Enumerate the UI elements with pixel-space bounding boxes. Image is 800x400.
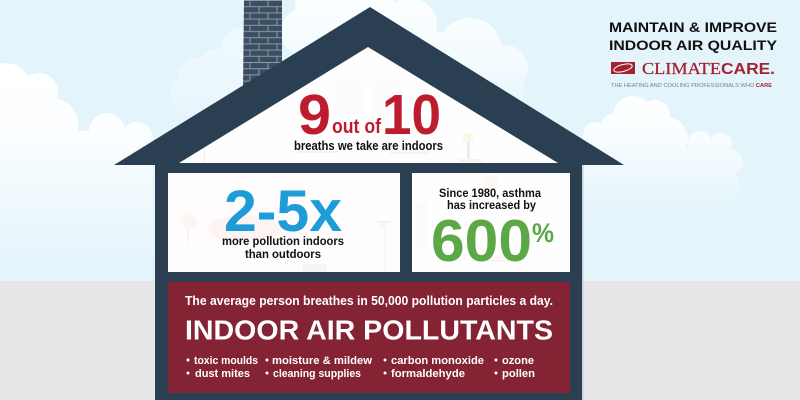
caption: more pollution indoors <box>222 236 344 261</box>
caption: since 1980 <box>439 188 542 212</box>
list column 3 <box>384 355 484 380</box>
logo wordmark <box>642 59 775 78</box>
roof <box>114 7 624 165</box>
list: pollutants <box>186 355 535 380</box>
chimney <box>243 0 282 88</box>
caption: since 1980: has increased by <box>447 200 537 212</box>
list column 1: toxic moulds <box>194 355 258 367</box>
wall edge highlight <box>582 165 584 400</box>
header: maintain and improve <box>609 19 778 53</box>
logo tagline: THE HEATING AND COOLING PROFESSIONALS WHO CARE <box>611 83 772 89</box>
stat: 9 out of 10: out of <box>332 116 381 138</box>
list column 4 <box>494 355 535 380</box>
attic interior <box>179 47 558 163</box>
list column 2: moisture & mildew <box>272 355 372 367</box>
logo wordmark: CARE. <box>721 61 775 78</box>
logo mark <box>611 62 635 74</box>
heading: indoor air pollutants: INDOOR AIR POLLUTANTS <box>185 314 553 346</box>
stat: 2-5x: 2-5x <box>224 179 342 244</box>
logo wordmark: CLIMATE <box>642 59 721 78</box>
list column 2: cleaning supplies <box>273 368 361 380</box>
header: maintain and improve: MAINTAIN & IMPROVE <box>609 19 777 35</box>
cloud: behind roof <box>281 0 528 118</box>
list column 3: formaldehyde <box>391 368 465 380</box>
panel: indoor air pollutants <box>168 282 570 393</box>
list column 1: dust mites <box>195 368 250 380</box>
stat: 9 out of 10: 10 <box>382 83 441 147</box>
list column 4: ozone <box>502 355 534 367</box>
sky <box>0 0 800 282</box>
list column 2 <box>266 355 372 380</box>
cloud: behind chimney <box>170 27 270 118</box>
caption: since 1980: Since 1980, asthma <box>439 188 542 200</box>
faint room furniture <box>415 175 510 262</box>
panel: pollution multiplier <box>168 173 400 272</box>
faint room furniture <box>180 213 393 272</box>
list column 3: carbon monoxide <box>391 355 484 367</box>
stat: 600%: % <box>532 218 554 248</box>
house walls <box>155 160 583 400</box>
cloud: left <box>0 63 153 262</box>
caption: more pollution indoors: more pollution indoors <box>222 236 344 248</box>
caption: more pollution indoors: than outdoors <box>245 249 321 261</box>
header: maintain and improve: INDOOR AIR QUALITY <box>609 37 778 53</box>
stat: 600%: 600 <box>431 208 532 274</box>
panel: asthma <box>412 173 570 274</box>
ground <box>0 281 800 400</box>
faint attic furniture <box>204 81 482 163</box>
list column 4: pollen <box>502 368 535 380</box>
stat: 9 out of 10 <box>298 83 441 147</box>
caption: breaths indoors: breaths we take are indoors <box>294 139 443 153</box>
cloud: right <box>583 96 743 212</box>
sentence: pollution particles: The average person breathes in 50,000 pollution particles a day. <box>185 293 553 308</box>
logo: ClimateCare <box>611 59 775 89</box>
list column 1 <box>186 355 258 380</box>
stat: 9 out of 10: 9 <box>298 83 331 147</box>
